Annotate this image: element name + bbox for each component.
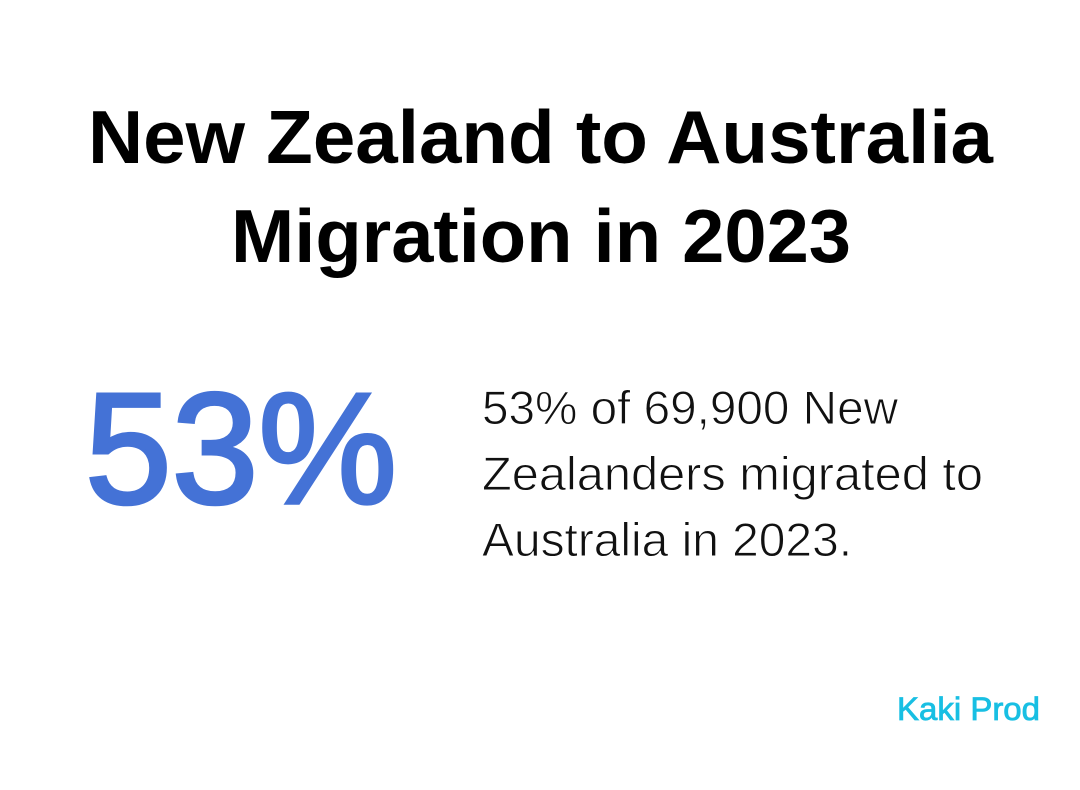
big statistic: 53%: 53% <box>85 361 397 537</box>
title: New Zealand to Australia <box>88 95 994 179</box>
logo: Kaki Prod: Kaki Prod <box>897 691 1040 727</box>
description text: 53% of 69,900 New <box>482 381 899 434</box>
description text: Zealanders migrated to <box>482 447 983 500</box>
title <box>88 95 994 278</box>
description text <box>482 381 983 566</box>
title: Migration in 2023 <box>231 194 851 278</box>
description text: Australia in 2023. <box>482 513 852 566</box>
